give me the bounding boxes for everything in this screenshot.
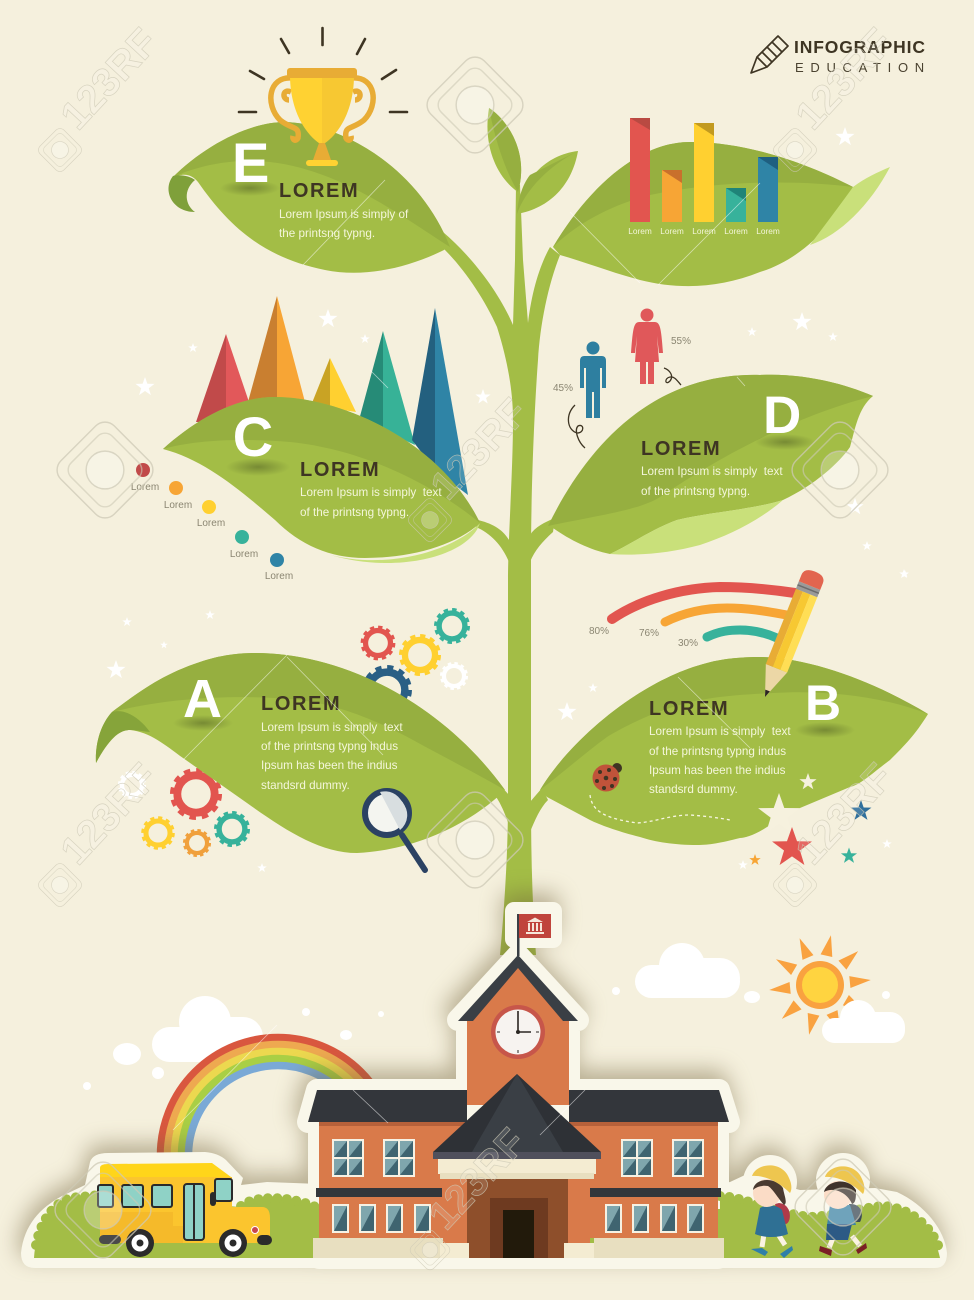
- leaf B shape: [540, 657, 928, 845]
- rainbow percentage arcs: 80%: [589, 626, 609, 637]
- letter B: B: [805, 675, 841, 731]
- bar chart: [628, 118, 780, 236]
- leaf A shape: [96, 653, 505, 853]
- text B: of the printsng typng indus: [649, 745, 786, 758]
- text B: Ipsum has been the indius: [649, 764, 786, 777]
- sprout leaves: [487, 108, 578, 214]
- text E: Lorem Ipsum is simply of: [279, 208, 409, 221]
- main roof: [308, 1090, 467, 1122]
- windows: [332, 1139, 704, 1233]
- bar chart: Lorem: [724, 226, 748, 236]
- rainbow percentage arcs: 30%: [678, 638, 698, 649]
- panel: top right leaf with bar chart: [553, 118, 890, 286]
- panel: leaf B: [540, 657, 928, 845]
- logo: infographic education: [751, 36, 931, 75]
- watermark overlay: 123RF: [787, 20, 901, 138]
- clock: [491, 1005, 545, 1059]
- clouds: [83, 943, 905, 1090]
- text E: the printsng typng.: [279, 227, 375, 240]
- dot legend: Lorem: [164, 500, 192, 511]
- rainbow percentage arcs: [589, 587, 795, 649]
- school building: [308, 914, 729, 1258]
- dot legend: [131, 463, 293, 582]
- text C: Lorem Ipsum is simply text: [300, 486, 442, 499]
- bar chart: Lorem: [660, 226, 684, 236]
- label 45%: 45%: [553, 383, 573, 394]
- porch roof: [433, 1074, 601, 1159]
- background stars: [106, 127, 909, 872]
- watermark overlay: 123RF: [52, 20, 166, 138]
- watermark overlay: 123RF: [420, 1120, 534, 1238]
- school tower: [458, 955, 578, 1105]
- panel: leaf A: [96, 653, 505, 853]
- icon: ladybug: [592, 763, 622, 792]
- child: girl: [751, 1165, 793, 1258]
- text D: of the printsng typng.: [641, 485, 750, 498]
- gears lower cluster: [120, 771, 248, 855]
- bar chart: Lorem: [628, 226, 652, 236]
- watermark overlay: 123RF: [52, 755, 166, 873]
- letter C: C: [233, 405, 273, 468]
- leaf E shape: [169, 122, 450, 273]
- rainbow: [160, 1038, 396, 1155]
- logo title: INFOGRAPHIC: [794, 37, 926, 57]
- heading C: LOREM: [300, 459, 380, 481]
- entrance: [438, 1159, 596, 1258]
- plant stem and branches: [443, 185, 560, 955]
- heading E: LOREM: [279, 180, 359, 202]
- ground paper cutout: [21, 902, 947, 1268]
- leaf shape: [553, 142, 890, 286]
- rainbow percentage arcs: 76%: [639, 628, 659, 639]
- icon: man: [580, 342, 606, 418]
- watermark overlay: 123RF: [422, 390, 536, 508]
- bar chart: Lorem: [756, 226, 780, 236]
- people icons with percentages: [553, 308, 691, 448]
- heading D: LOREM: [641, 438, 721, 460]
- letter E: E: [232, 131, 269, 194]
- text B: Lorem Ipsum is simply text: [649, 725, 791, 738]
- dot legend: Lorem: [131, 482, 159, 493]
- leaf D shape: [548, 375, 873, 555]
- icon: pencil: [754, 567, 826, 701]
- icon: pencil: [751, 36, 788, 73]
- text C: of the printsng typng.: [300, 506, 409, 519]
- letter D: D: [763, 386, 801, 445]
- text D: Lorem Ipsum is simply text: [641, 465, 783, 478]
- base: [313, 1238, 724, 1258]
- dot legend: Lorem: [197, 518, 225, 529]
- school bus: [98, 1163, 272, 1257]
- panel: leaf D: [548, 375, 873, 555]
- leaf C shape: [163, 397, 480, 563]
- text A: Lorem Ipsum is simply text: [261, 721, 403, 734]
- colored stars: [749, 773, 871, 865]
- text A: standsrd dummy.: [261, 779, 350, 792]
- child: boy: [819, 1166, 867, 1256]
- dot legend: Lorem: [265, 571, 293, 582]
- heading A: LOREM: [261, 693, 341, 715]
- dot legend: Lorem: [230, 549, 258, 560]
- bushes: [34, 1195, 940, 1258]
- icon: magnifier: [365, 791, 425, 870]
- triangle chart: [196, 296, 468, 495]
- panel: leaf C: [163, 397, 480, 563]
- gears upper cluster: [363, 610, 468, 712]
- letter A: A: [183, 669, 222, 729]
- icon: sun: [769, 934, 871, 1036]
- text A: of the printsng typng indus: [261, 740, 398, 753]
- dark belts: [316, 1188, 721, 1197]
- logo subtitle: EDUCATION: [795, 60, 931, 75]
- heading B: LOREM: [649, 698, 729, 720]
- label 55%: 55%: [671, 336, 691, 347]
- icon: woman: [631, 308, 663, 384]
- building walls: [319, 1122, 718, 1238]
- flag: [517, 914, 551, 956]
- text B: standsrd dummy.: [649, 783, 738, 796]
- panel: leaf E: [169, 122, 450, 273]
- bar chart: Lorem: [692, 226, 716, 236]
- text A: Ipsum has been the indius: [261, 759, 398, 772]
- watermark overlay: 123RF: [787, 755, 901, 873]
- icon: trophy: [239, 28, 407, 166]
